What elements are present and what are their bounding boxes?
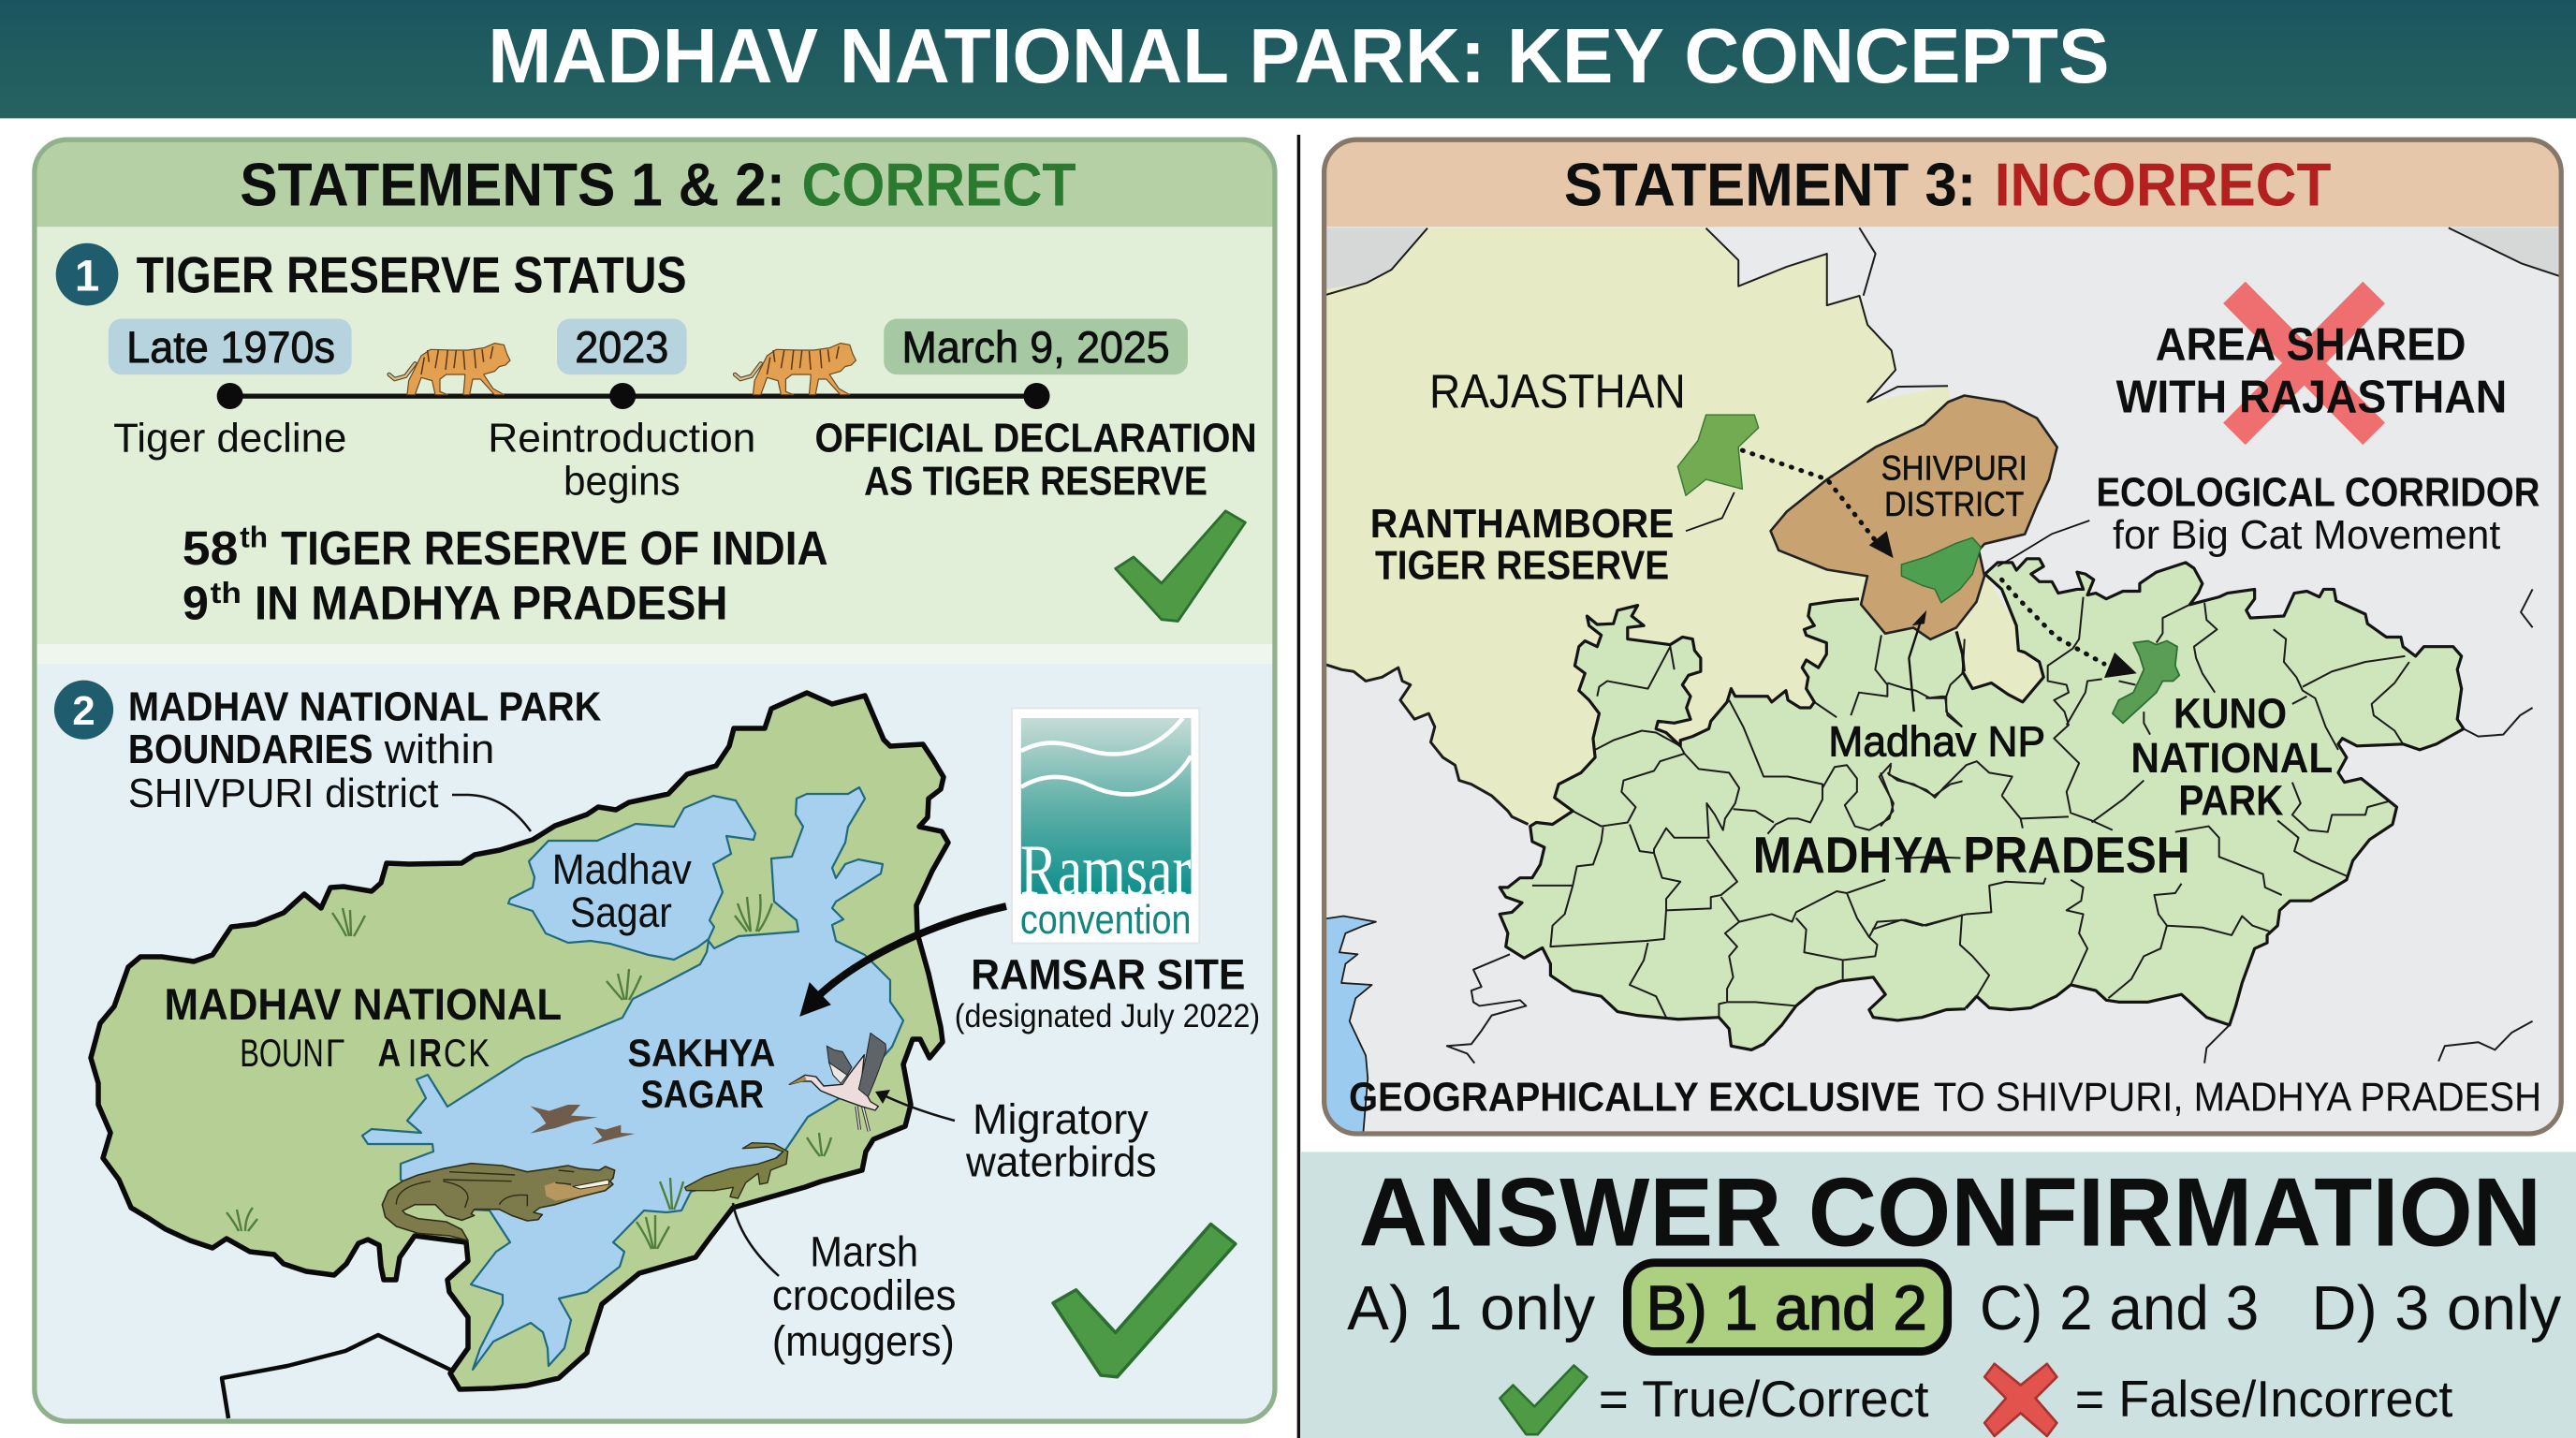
label: ranthambore tiger reserve bbox=[1370, 501, 1674, 589]
heading: park boundaries: MADHAV NATIONAL PARK bbox=[128, 684, 602, 730]
option c: C) 2 and 3 bbox=[1980, 1274, 2259, 1343]
leader: ecological corridor bbox=[1998, 521, 2089, 566]
label: madhav national boundary park: C bbox=[444, 1031, 466, 1075]
dotted corridor arrow to shivpuri bbox=[1742, 450, 1894, 558]
logo: ramsar convention: Ramsar bbox=[1020, 829, 1192, 910]
label: marsh crocodiles: (muggers) bbox=[772, 1317, 955, 1365]
label: official declaration: OFFICIAL DECLARATION bbox=[815, 416, 1257, 462]
label: marsh crocodiles: crocodiles bbox=[772, 1271, 956, 1319]
legend: true correct bbox=[1500, 1365, 1928, 1434]
gujarat border line bbox=[1447, 954, 1526, 1064]
icon: tiger 1 bbox=[389, 344, 510, 395]
label: sakhya sagar: SAKHYA bbox=[627, 1031, 775, 1075]
west and south map layer bbox=[1289, 228, 2043, 1152]
pill: 2023: 2023 bbox=[575, 323, 668, 373]
label: madhav sagar: Madhav bbox=[552, 845, 692, 893]
heading: park boundaries: within bbox=[384, 726, 494, 772]
dotted corridor arrow to kuno bbox=[2002, 580, 2137, 678]
panel: statement 3 bbox=[1289, 139, 2566, 1152]
leader: ranthambore bbox=[1686, 492, 1734, 531]
text: tiger reserve ranks bbox=[183, 520, 828, 630]
caption: geographically exclusive bbox=[1349, 1074, 2541, 1120]
logo: ramsar convention: convention bbox=[1020, 897, 1191, 943]
label: madhav sagar bbox=[552, 845, 692, 936]
option b highlighted: B) 1 and 2 bbox=[1647, 1274, 1927, 1343]
title bar bbox=[0, 0, 2576, 118]
label: madhav national boundary park bbox=[165, 980, 562, 1075]
label: marsh crocodiles bbox=[772, 1227, 956, 1365]
label: sakhya sagar bbox=[627, 1031, 775, 1116]
label: madhav np: Madhav NP bbox=[1828, 717, 2045, 765]
madhya pradesh fill west bbox=[1500, 599, 1969, 1049]
label: ecological corridor bbox=[2097, 470, 2539, 558]
text: tiger reserve ranks: TIGER RESERVE OF INDIA bbox=[281, 521, 828, 575]
label: reintroduction begins bbox=[488, 416, 755, 504]
park land area bbox=[91, 693, 948, 1389]
legend: false incorrect: = False/Incorrect bbox=[2075, 1371, 2452, 1428]
option a: A) 1 only bbox=[1347, 1274, 1596, 1343]
lake: madhav sagar bbox=[508, 796, 755, 960]
water: arabian sea bbox=[1326, 916, 1377, 1131]
icon: migratory crane bbox=[789, 1033, 886, 1131]
caption: geographically exclusive: GEOGRAPHICALLY EXCLUSIVE bbox=[1349, 1074, 1921, 1120]
east map layer bbox=[1872, 559, 2533, 1064]
heading: statement 3 incorrect: STATEMENT 3: bbox=[1564, 150, 1976, 218]
label: ranthambore tiger reserve: TIGER RESERVE bbox=[1375, 543, 1669, 589]
heading: park boundaries bbox=[128, 684, 602, 816]
heading: park boundaries: SHIVPURI district bbox=[128, 770, 439, 816]
heading: statements 1 and 2 correct: STATEMENTS 1 & 2: bbox=[240, 150, 785, 218]
legend: false incorrect bbox=[1984, 1364, 2452, 1436]
text: tiger reserve ranks: 9 bbox=[183, 577, 209, 630]
madhya pradesh outline east bbox=[1963, 559, 2464, 1025]
shivpuri district bbox=[1771, 395, 2057, 639]
madhya pradesh fill east bbox=[1963, 559, 2464, 1025]
label: reintroduction begins: Reintroduction bbox=[488, 416, 755, 462]
north east border lines bbox=[1677, 227, 2566, 639]
label: madhav national boundary park: BOUN bbox=[240, 1031, 324, 1075]
label: shivpuri district: SHIVPURI bbox=[1881, 448, 2027, 487]
divider bbox=[1297, 135, 1300, 1438]
label: madhav national boundary park: I bbox=[407, 1031, 417, 1075]
label: tiger decline: Tiger decline bbox=[113, 416, 346, 462]
pill: 2023 bbox=[557, 318, 687, 374]
label: kuno national park: NATIONAL bbox=[2130, 734, 2333, 782]
icon: small mugger crocodile bbox=[685, 1143, 788, 1198]
number badge 1 bbox=[56, 243, 118, 305]
heading: statement 3 incorrect bbox=[1564, 150, 2331, 218]
madhya pradesh districts east bbox=[1872, 563, 2409, 998]
label: official declaration bbox=[815, 416, 1257, 504]
label: rajasthan: RAJASTHAN bbox=[1429, 364, 1686, 418]
madhya pradesh districts west bbox=[1532, 635, 1966, 1018]
label: madhav national boundary park: Γ bbox=[326, 1031, 345, 1075]
icon: green check 1 bbox=[1116, 511, 1245, 621]
text: tiger reserve ranks: th bbox=[240, 520, 268, 553]
timeline bbox=[109, 318, 1257, 504]
panel: answer confirmation bbox=[1301, 1152, 2576, 1438]
text: area shared with rajasthan bbox=[2116, 319, 2507, 423]
outer border lines east bbox=[2204, 589, 2533, 1064]
label: ranthambore tiger reserve: RANTHAMBORE bbox=[1370, 501, 1674, 547]
option d: D) 3 only bbox=[2311, 1274, 2562, 1343]
heading: statements 1 and 2 correct: CORRECT bbox=[801, 150, 1076, 218]
heading: statements 1 and 2 correct bbox=[240, 150, 1076, 218]
madhya pradesh outline west bbox=[1500, 599, 1966, 1049]
label: kuno national park: KUNO bbox=[2174, 690, 2287, 738]
label: migratory waterbirds: waterbirds bbox=[965, 1138, 1157, 1186]
arrow: ramsar to lake bbox=[800, 906, 1006, 1016]
kuno patch bbox=[2113, 641, 2179, 723]
icon: green check 2 bbox=[1053, 1225, 1236, 1377]
text: tiger reserve ranks: 58 bbox=[183, 521, 238, 575]
icon: big mugger crocodile bbox=[382, 1164, 615, 1240]
icon: flying ducks bbox=[531, 1105, 635, 1145]
heading: tiger reserve status: TIGER RESERVE STATUS bbox=[137, 246, 687, 303]
logo: ramsar convention bbox=[1012, 708, 1199, 943]
pill: march 9 2025: March 9, 2025 bbox=[902, 323, 1170, 373]
number badge 1: 1 bbox=[75, 252, 99, 301]
label: madhya pradesh: MADHYA PRADESH bbox=[1753, 827, 2190, 884]
heading: statement 3 incorrect: INCORRECT bbox=[1995, 150, 2331, 218]
lake: sakhya sagar bbox=[362, 787, 903, 1370]
leader lines bbox=[452, 795, 955, 1276]
ranthambore patch bbox=[1677, 415, 1759, 495]
panel: statements 1 and 2 bbox=[35, 139, 1275, 1421]
label: kuno national park bbox=[2130, 690, 2333, 825]
label: official declaration: AS TIGER RESERVE bbox=[864, 458, 1208, 504]
number badge 2: 2 bbox=[72, 688, 95, 734]
label: shivpuri district bbox=[1881, 448, 2027, 523]
text: area shared with rajasthan: AREA SHARED bbox=[2156, 319, 2466, 370]
icon: tiger 2 bbox=[735, 344, 856, 395]
label: madhav national boundary park: R bbox=[419, 1031, 442, 1075]
label: migratory waterbirds bbox=[965, 1095, 1157, 1186]
label: madhav national boundary park: A bbox=[378, 1031, 401, 1075]
label: reintroduction begins: begins bbox=[564, 458, 681, 504]
pill: late 1970s: Late 1970s bbox=[126, 323, 335, 373]
label: madhav sagar: Sagar bbox=[570, 888, 672, 936]
heading: answer confirmation: ANSWER CONFIRMATION bbox=[1358, 1157, 2541, 1266]
map: madhav national park bbox=[91, 693, 1006, 1418]
label: migratory waterbirds: Migratory bbox=[973, 1095, 1149, 1143]
title bar: MADHAV NATIONAL PARK: KEY CONCEPTS bbox=[488, 13, 2110, 99]
map: central india bbox=[1289, 227, 2566, 1152]
label: madhav national boundary park: K bbox=[468, 1031, 490, 1075]
number badge 2 bbox=[54, 681, 113, 740]
text: tiger reserve ranks: IN MADHYA PRADESH bbox=[255, 577, 728, 630]
label: sakhya sagar: SAGAR bbox=[640, 1072, 764, 1116]
arrow: madhav np bbox=[1909, 610, 1926, 712]
text: tiger reserve ranks: th bbox=[211, 576, 242, 609]
heading: park boundaries: BOUNDARIES bbox=[128, 726, 373, 772]
label: ecological corridor: for Big Cat Movement bbox=[2113, 512, 2500, 558]
label: kuno national park: PARK bbox=[2178, 777, 2284, 825]
text: area shared with rajasthan: WITH RAJASTHAN bbox=[2116, 373, 2507, 423]
icon: red cross over claim bbox=[2234, 292, 2374, 433]
madhav national park patch bbox=[1901, 537, 1981, 603]
rajasthan region bbox=[1289, 228, 2043, 825]
legend: true correct: = True/Correct bbox=[1599, 1371, 1928, 1428]
label: ramsar site bbox=[955, 951, 1260, 1034]
boundary road line bbox=[222, 1335, 452, 1418]
label: madhav national boundary park: MADHAV NATIONAL bbox=[165, 980, 562, 1030]
label: ramsar site: RAMSAR SITE bbox=[971, 951, 1245, 999]
label: ramsar site: (designated July 2022) bbox=[955, 998, 1260, 1034]
corners and top borders bbox=[1326, 228, 2559, 288]
grass tufts bbox=[227, 894, 831, 1249]
header band bbox=[1325, 141, 2559, 227]
label: shivpuri district: DISTRICT bbox=[1884, 485, 2024, 523]
label: marsh crocodiles: Marsh bbox=[810, 1227, 918, 1275]
